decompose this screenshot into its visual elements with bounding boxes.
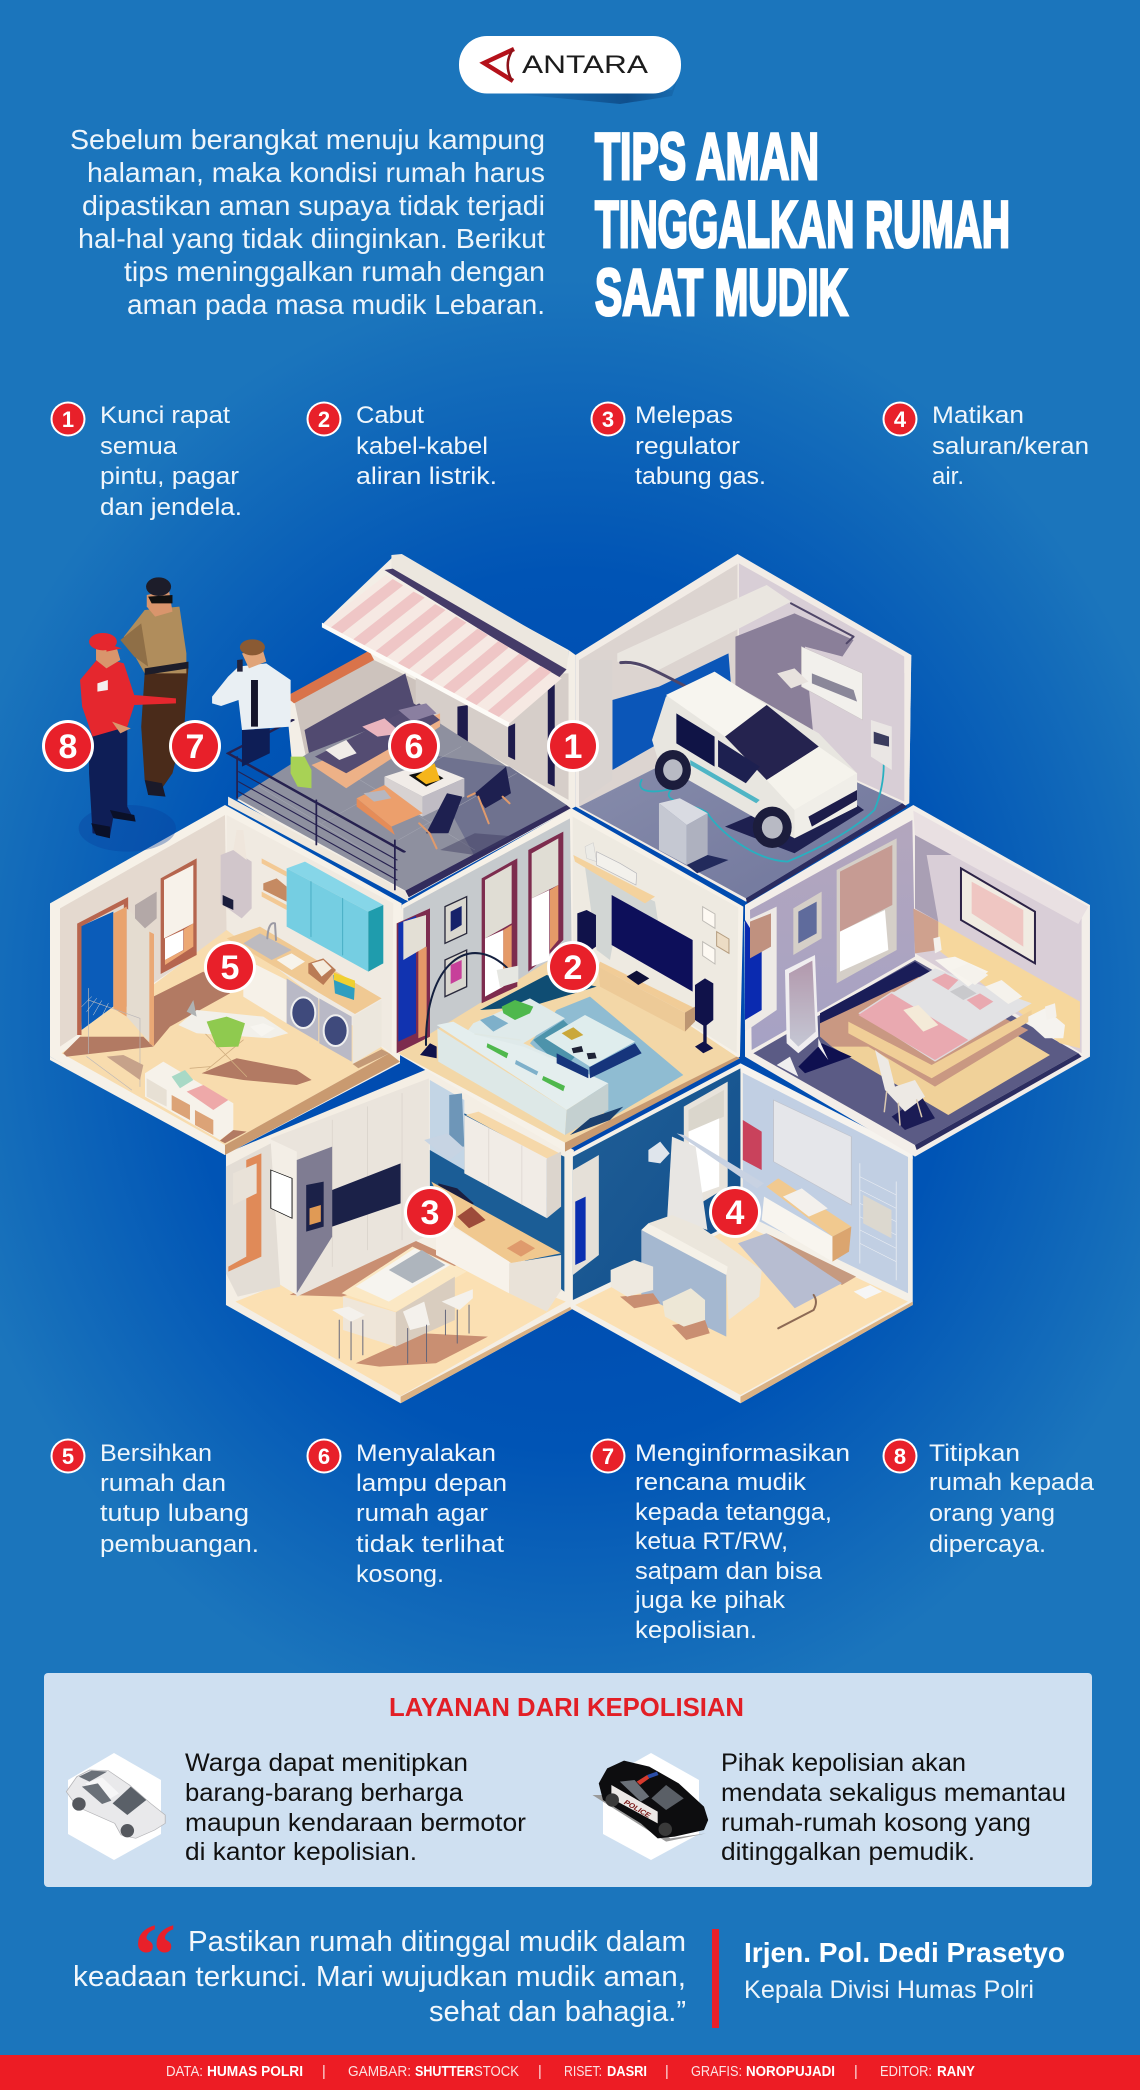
text: left service [185,1749,526,1866]
room: garage with car [576,554,911,903]
tip 8: 8 [894,1444,906,1469]
tip 6: tidak terlihat [356,1531,504,1558]
tip 6: kosong. [356,1561,444,1588]
hexagon: police car [603,1753,699,1860]
intro paragraph: tips meninggalkan rumah dengan [124,256,545,287]
badge 5: 5 [221,949,239,987]
police officer [120,577,188,797]
footer credits: EDITOR: [880,2064,932,2080]
tip 7: satpam dan bisa [635,1558,823,1585]
room: kitchen [226,1068,574,1403]
tip 7: kepada tetangga, [635,1499,832,1526]
text: right service: Pihak kepolisian akan [721,1749,966,1777]
badge 4: 4 [726,1194,745,1232]
footer credits: | [854,2064,858,2080]
badge 8 [42,720,94,772]
panel heading: LAYANAN DARI KEPOLISIAN [389,1692,744,1722]
tip 3: regulator [635,433,740,460]
tip 8: rumah kepada [929,1469,1095,1496]
tip 5: tutup lubang [100,1500,249,1527]
text: left service: di kantor kepolisian. [185,1838,417,1866]
intro paragraph: dipastikan aman supaya tidak terjadi [82,190,545,221]
text: left service: Warga dapat menitipkan [185,1749,468,1777]
tip 2: Cabut [356,402,424,429]
badge 8: 8 [59,728,77,766]
tip 8: Titipkan [929,1440,1020,1467]
intro paragraph: aman pada masa mudik Lebaran. [127,289,545,320]
tip 5: 5 [62,1444,74,1469]
footer credits: NOROPUJADI [746,2064,835,2080]
footer credits: | [322,2064,326,2080]
tip 7: rencana mudik [635,1469,807,1496]
room: balcony [228,554,576,902]
badge 5 [204,941,256,993]
man in red shirt [80,633,176,838]
title: SAAT MUDIK [595,255,848,329]
tip 5: pembuangan. [100,1531,259,1558]
tip 7: kepolisian. [635,1617,757,1644]
logo: ANTARA: ANTARA [522,51,648,79]
title: TIPS AMAN [595,119,819,193]
icon: police car: POLICE [622,1798,653,1819]
footer credits: STOCK [474,2064,519,2080]
text: left service: maupun kendaraan bermotor [185,1809,526,1837]
quote text: keadaan terkunci. Mari wujudkan mudik aman, [73,1961,686,1993]
tip 5 [50,1438,259,1558]
tip 8 [882,1438,1095,1558]
text: right service: rumah-rumah kosong yang [721,1809,1031,1837]
tip 3: Melepas [635,402,733,429]
badge 6: 6 [405,728,423,766]
tip 4: Matikan [932,402,1024,429]
badge 1 [547,720,599,772]
tip 5: rumah dan [100,1470,226,1497]
quote divider [712,1929,719,2028]
logo: ANTARA [459,36,681,104]
tip 8: dipercaya. [929,1531,1046,1558]
tip 1: Kunci rapat [100,402,230,429]
shadow of the people [79,805,176,852]
tip 1: semua [100,433,178,460]
intro paragraph: Sebelum berangkat menuju kampung [70,124,545,155]
intro paragraph [70,124,545,320]
badge 2 [547,941,599,993]
panel: layanan dari kepolisian [44,1673,1092,1887]
people: neighbours and police [79,577,291,852]
tip 3: 3 [602,407,614,432]
tip 7: juga ke pihak [634,1587,786,1614]
tip 1 [50,402,242,521]
intro paragraph: hal-hal yang tidak diinginkan. Berikut [78,223,545,254]
text: right service: mendata sekaligus memantau [721,1779,1066,1807]
footer credits: | [538,2064,542,2080]
quote mark: “ [134,1906,176,2005]
quote text [73,1926,686,2028]
tip 2: kabel-kabel [356,433,488,460]
tip 6: rumah agar [356,1500,488,1527]
man on the phone [212,639,291,767]
footer credits: | [665,2064,669,2080]
footer credits: RISET: [564,2064,602,2080]
room: laundry [50,805,402,1155]
footer credits: DATA: [166,2064,203,2080]
text: right service: ditinggalkan pemudik. [721,1838,975,1866]
hexagon: white car [68,1753,161,1860]
tip 6: lampu depan [356,1470,507,1497]
footer credits: GRAFIS: [691,2064,742,2080]
badge 2: 2 [564,949,582,987]
tip 4: air. [932,463,964,490]
footer credits: DASRI [607,2064,647,2080]
badge 6 [388,720,440,772]
icon: white car [66,1770,165,1838]
intro paragraph: halaman, maka kondisi rumah harus [87,157,545,188]
tip 6 [306,1438,507,1588]
quote text: Pastikan rumah ditinggal mudik dalam [188,1926,686,1958]
tip 4: saluran/keran [932,433,1089,460]
icon: police car [592,1761,708,1842]
text: left service: barang-barang berharga [185,1779,463,1807]
tip 3: tabung gas. [635,463,766,490]
quote attribution: Irjen. Pol. Dedi Prasetyo [744,1937,1065,1968]
footer credits: HUMAS POLRI [207,2064,303,2080]
tip 2 [306,402,497,490]
quote attribution: Kepala Divisi Humas Polri [744,1976,1034,2004]
tip 6: Menyalakan [356,1440,496,1467]
tip 4 [882,402,1089,490]
tip 2: 2 [318,407,330,432]
tip 1: pintu, pagar [100,463,239,490]
room: bedroom [744,805,1090,1157]
quote attribution [744,1937,1065,2004]
text: right service [721,1749,1066,1866]
tip 2: aliran listrik. [356,463,497,490]
tip 1: dan jendela. [100,494,242,521]
room: bathroom [571,1063,913,1403]
quote text: sehat dan bahagia.” [429,1996,686,2028]
tip 7: ketua RT/RW, [635,1528,788,1555]
tip 7 [590,1438,850,1644]
tip 7: Menginformasikan [635,1440,850,1467]
badge 1: 1 [564,728,582,766]
tip 7: 7 [602,1444,614,1469]
tip 1: 1 [62,407,74,432]
badge 7: 7 [186,728,204,766]
badge 3: 3 [421,1194,439,1232]
badge 4 [709,1186,761,1238]
title [595,119,1010,329]
footer credits: SHUTTER [415,2064,474,2080]
footer credits [0,2055,1140,2090]
footer credits: RANY [937,2064,975,2080]
tip 6: 6 [318,1444,330,1469]
tip 8: orang yang [929,1500,1055,1527]
badge 3 [404,1186,456,1238]
tip 4: 4 [894,407,907,432]
room: living room [397,808,743,1152]
tip 5: Bersihkan [100,1440,212,1467]
footer credits: GAMBAR: [348,2064,411,2080]
badge 7 [169,720,221,772]
tip 3 [590,402,766,490]
